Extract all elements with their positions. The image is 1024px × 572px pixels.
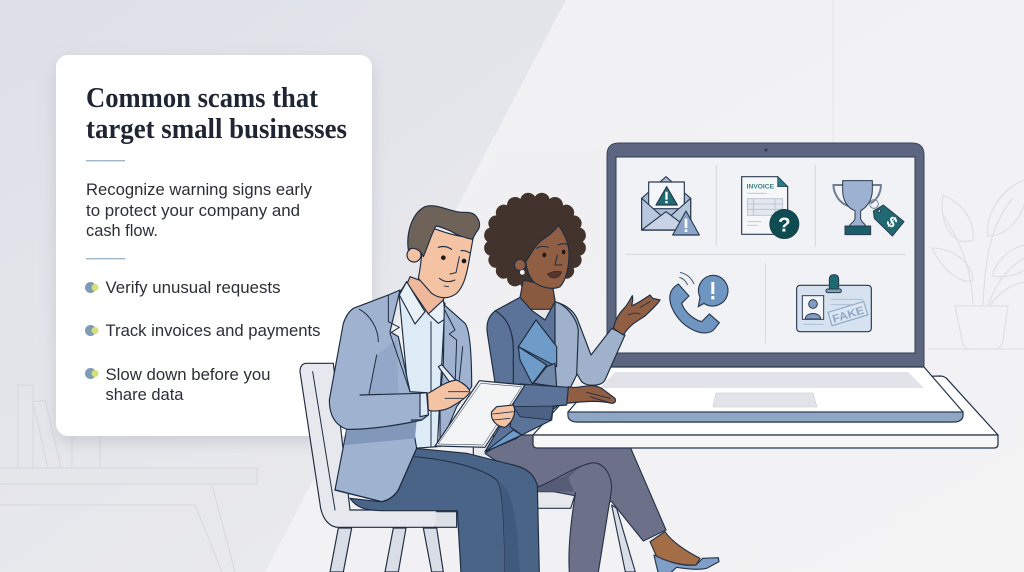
icon: fake ID badge: [797, 275, 871, 332]
woman front leg: [568, 463, 612, 572]
heading: target small businesses: [86, 114, 347, 145]
woman raised arm and hand: [555, 295, 660, 385]
shoe: [654, 555, 719, 572]
icon: trophy and price tag: [833, 181, 904, 236]
woman inner top: [530, 309, 556, 340]
icon: invoice: INVOICE: [747, 184, 775, 191]
man: [329, 206, 539, 572]
intro text: cash flow.: [86, 222, 158, 240]
icon: invoice: [742, 177, 799, 239]
woman neck: [520, 280, 555, 311]
laptop screen bezel: [607, 143, 924, 367]
bullet: track: Track invoices and payments: [106, 322, 320, 340]
panel: text card: [56, 55, 372, 436]
intro text: Recognize warning signs early: [86, 181, 313, 199]
icon: fake ID badge: FAKE: [831, 305, 866, 326]
man's chair: [300, 363, 457, 572]
screen icons: [626, 165, 906, 343]
man jacket right side: [440, 305, 472, 447]
laptop: [568, 143, 963, 422]
heading: [86, 83, 347, 145]
intro text: [86, 181, 313, 240]
laptop base: [568, 367, 963, 422]
heading: Common scams that: [86, 83, 318, 114]
man tablet, pen and hands: [420, 365, 525, 447]
man head: [407, 206, 480, 298]
woman hair: [484, 193, 586, 291]
decorative plant: [932, 180, 1024, 349]
bullet: slow down: share data: [106, 386, 184, 404]
woman head: [514, 225, 569, 288]
man trousers: [350, 448, 539, 572]
woman jacket: [485, 297, 578, 452]
people: [300, 193, 660, 572]
intro text: to protect your company and: [86, 202, 300, 220]
icon: phone warning: [670, 272, 728, 333]
woman back leg: [485, 435, 666, 541]
bullet: slow down: Slow down before you: [106, 366, 270, 384]
woman lower body: [485, 435, 719, 572]
man neck and shirt: [399, 282, 445, 448]
table: [533, 376, 998, 448]
laptop screen: [616, 157, 915, 353]
bullet: slow down: [85, 366, 270, 404]
bullet: verify: Verify unusual requests: [106, 279, 280, 297]
decorative shelf with books: [0, 385, 257, 572]
second chair: [473, 397, 635, 572]
woman forearm and hand on laptop: [510, 384, 615, 435]
man jacket: [329, 290, 428, 502]
woman: [484, 193, 660, 452]
icon: trophy and price tag: $: [883, 213, 901, 232]
icon: email warning: [642, 177, 699, 235]
icon: invoice: ?: [778, 213, 791, 236]
foot: [650, 532, 700, 565]
